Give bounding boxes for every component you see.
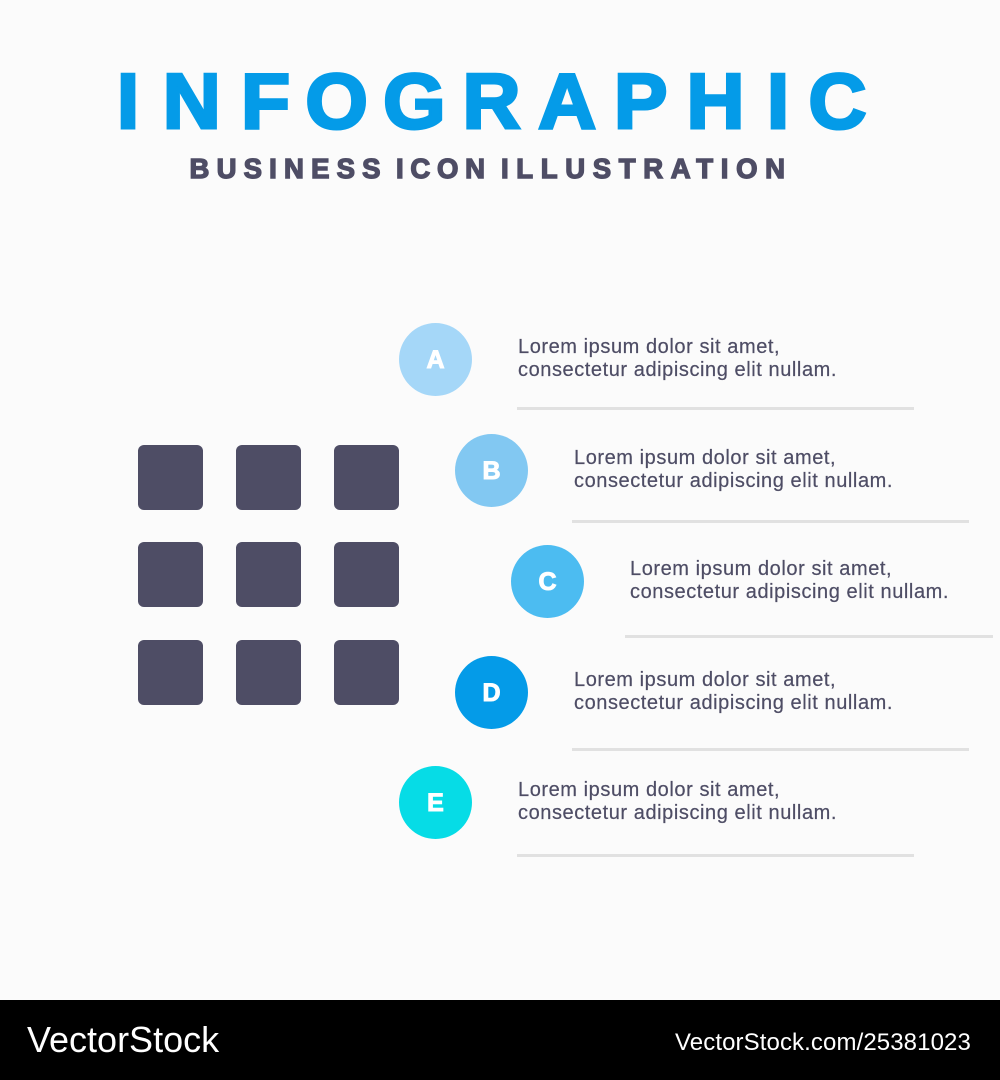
item C: Lorem ipsum dolor sit amet,	[630, 558, 892, 580]
footer bar	[0, 1000, 1000, 1080]
item D: Lorem ipsum dolor sit amet,	[574, 669, 836, 691]
item E: Lorem ipsum dolor sit amet,	[518, 779, 780, 801]
item C	[511, 545, 993, 638]
icon: grid of nine squares	[138, 445, 399, 705]
item A: consectetur adipiscing elit nullam.	[518, 359, 837, 381]
item E: E	[427, 789, 444, 817]
subtitle: ICON	[396, 153, 485, 184]
footer logo: VectorStock	[27, 1019, 219, 1060]
subtitle: BUSINESS	[190, 153, 380, 184]
item B: consectetur adipiscing elit nullam.	[574, 470, 893, 492]
item E: consectetur adipiscing elit nullam.	[518, 802, 837, 824]
item D	[455, 656, 969, 751]
item B: B	[482, 457, 501, 485]
item E	[399, 766, 914, 857]
item D: consectetur adipiscing elit nullam.	[574, 692, 893, 714]
item B: Lorem ipsum dolor sit amet,	[574, 447, 836, 469]
item A	[399, 323, 914, 410]
item C: C	[538, 568, 557, 596]
item B	[455, 434, 969, 523]
item D: D	[482, 679, 501, 707]
item A: Lorem ipsum dolor sit amet,	[518, 336, 780, 358]
subtitle: ILLUSTRATION	[501, 153, 785, 184]
item C: consectetur adipiscing elit nullam.	[630, 581, 949, 603]
subtitle	[190, 153, 785, 184]
title: INFOGRAPHIC	[117, 57, 867, 144]
item A: A	[426, 346, 445, 374]
footer url: VectorStock.com/25381023	[675, 1029, 971, 1056]
